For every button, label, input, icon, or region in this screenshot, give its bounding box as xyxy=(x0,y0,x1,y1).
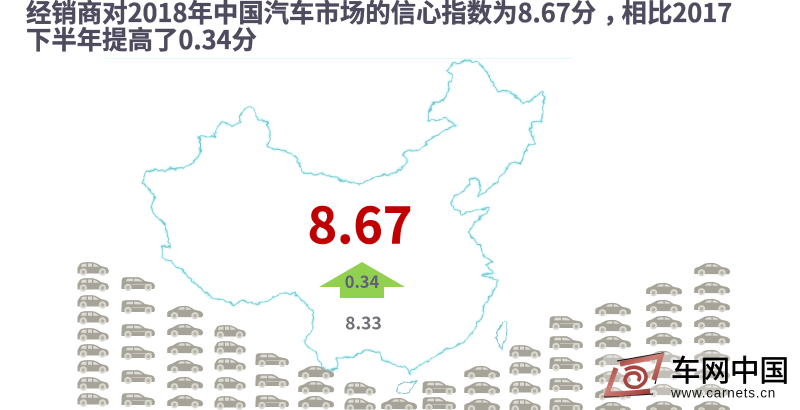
cars column 12 xyxy=(549,316,583,410)
previous index value: 8.33 xyxy=(345,310,382,336)
up arrow with increase value: 0.34 xyxy=(345,269,380,293)
icon: logo mark xyxy=(604,353,663,397)
map of China outline xyxy=(143,61,544,395)
divider line under title xyxy=(105,58,571,59)
up arrow with increase value xyxy=(319,262,405,298)
logo url: www.carnets.cn xyxy=(670,386,776,400)
cars column 1 xyxy=(78,262,109,407)
title xyxy=(26,0,732,57)
cars column 15 xyxy=(694,263,730,410)
cars column 7 xyxy=(344,382,376,410)
cars column 10 xyxy=(464,366,500,410)
cars column 14 xyxy=(646,283,682,410)
cars column 11 xyxy=(510,345,541,410)
logo name: 车网中国 xyxy=(671,348,789,390)
cars column 3 xyxy=(167,306,203,408)
cars column 2 xyxy=(121,277,155,407)
cars column 8 xyxy=(381,398,417,410)
main index value: 8.67 xyxy=(308,186,412,258)
cars column 9 xyxy=(422,381,456,410)
cars column 5 xyxy=(255,353,289,409)
logo: carnets xyxy=(603,348,793,402)
title: 下半年提高了0.34分 xyxy=(26,21,257,57)
cars column 13 xyxy=(595,303,631,410)
cars column 6 xyxy=(298,366,334,410)
cars column 4 xyxy=(214,325,246,410)
